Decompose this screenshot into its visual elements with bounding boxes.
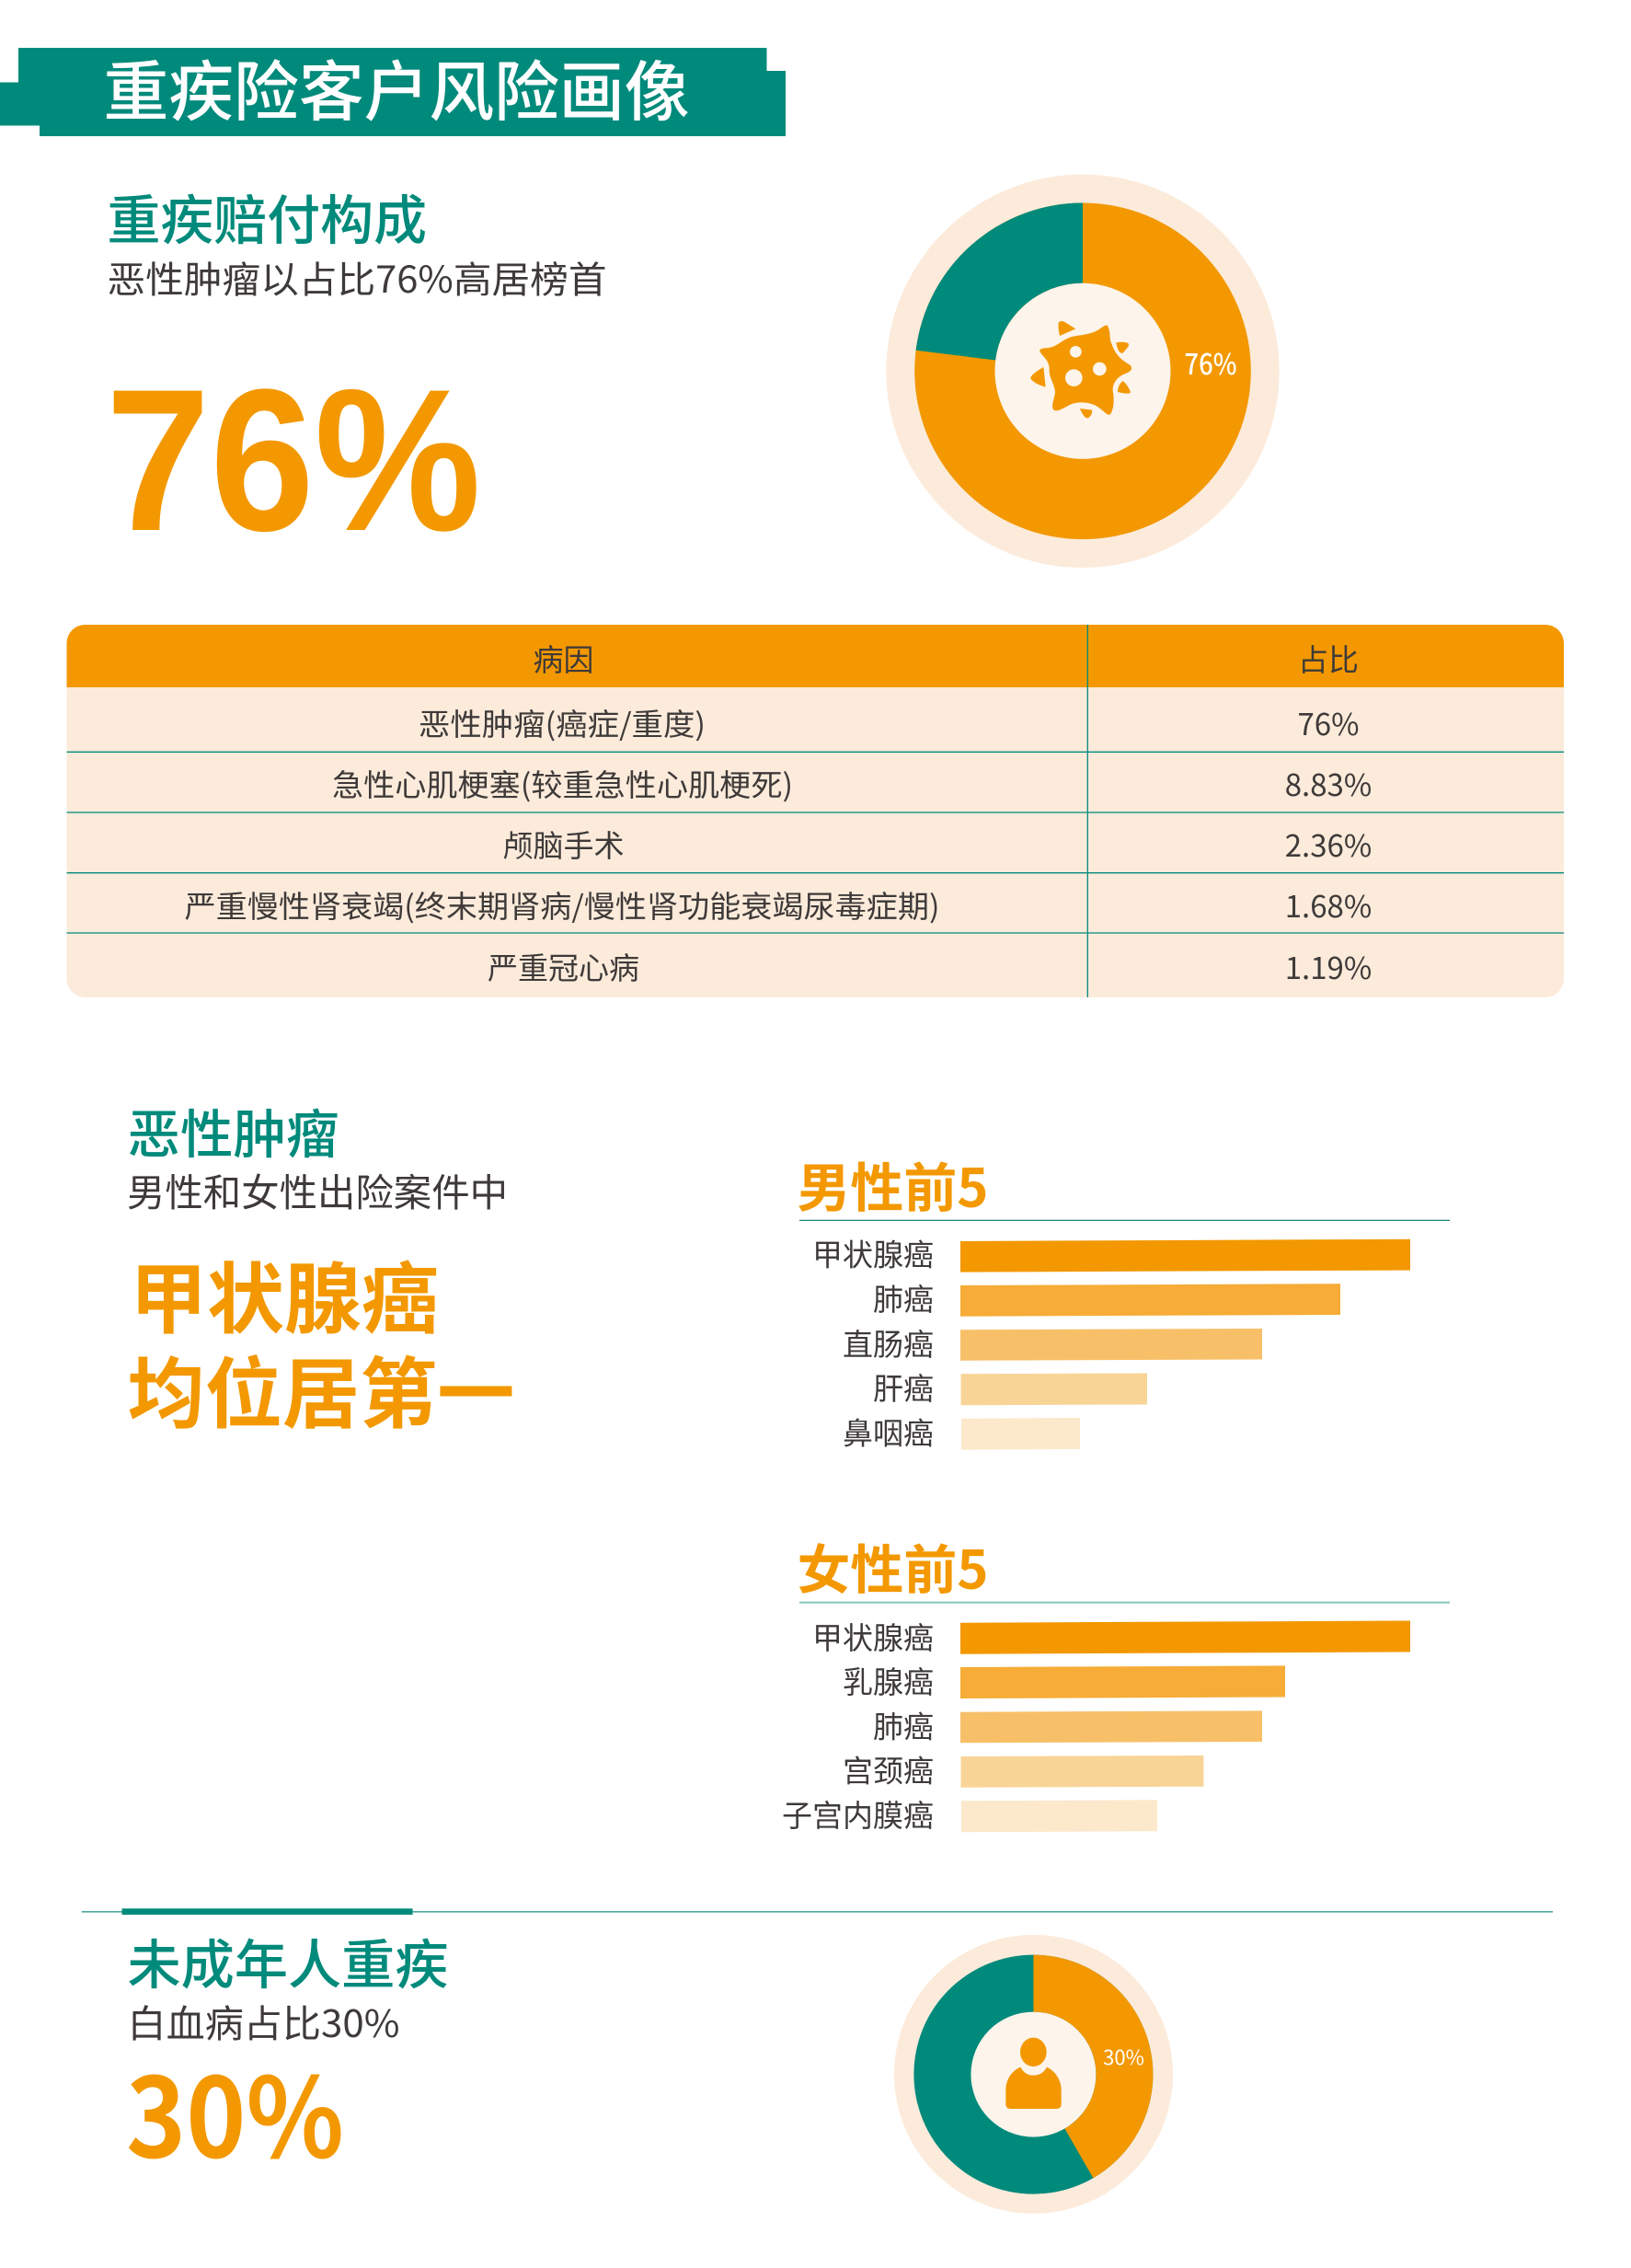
heading: claims composition: 重疾赔付构成 xyxy=(107,178,427,255)
big number 76%: 76% xyxy=(106,347,481,573)
bar: endometrial xyxy=(782,1791,1157,1836)
row 2: 急性心肌梗塞(较重急性心肌梗死) xyxy=(332,761,793,805)
bar: thyroid xyxy=(812,1231,1410,1275)
row 5 xyxy=(488,944,1372,988)
heading: female top 5: 女性前5 xyxy=(797,1527,988,1605)
table: causes and shares xyxy=(66,625,1564,997)
heading: malignant tumor: 恶性肿瘤 xyxy=(127,1093,339,1169)
title banner: 重疾险客户风险画像 xyxy=(103,40,690,134)
row 5: 严重冠心病 xyxy=(488,944,639,988)
row 2 xyxy=(332,761,1372,805)
donut chart: 30% xyxy=(894,1935,1173,2214)
row 3 xyxy=(502,822,1372,866)
bar: nasopharyngeal xyxy=(843,1410,1080,1454)
bar: rectal: 直肠癌 xyxy=(843,1320,934,1364)
icon: cancer cell xyxy=(1030,321,1131,418)
table header: 病因 xyxy=(534,636,594,680)
row 1: 76% xyxy=(1297,700,1360,744)
bar chart: female top 5 xyxy=(782,1527,1450,1836)
table header xyxy=(534,636,1359,680)
row 3: 2.36% xyxy=(1285,822,1372,866)
section: minors critical illness xyxy=(126,1922,448,2190)
section divider xyxy=(82,1908,1553,1915)
donut chart: 76% xyxy=(886,175,1280,568)
bar: rectal xyxy=(843,1320,1262,1364)
bar: liver xyxy=(873,1364,1147,1409)
donut label 30%: 30% xyxy=(1103,2042,1144,2071)
row 4 xyxy=(184,882,1372,927)
subheading: malignant tumor share: 恶性肿瘤以占比76%高居榜首 xyxy=(107,250,607,304)
icon: person xyxy=(1005,2038,1062,2109)
row 4: 严重慢性肾衰竭(终末期肾病/慢性肾功能衰竭尿毒症期) xyxy=(184,882,940,927)
heading: male top 5: 男性前5 xyxy=(797,1145,988,1222)
heading: minors: 未成年人重疾 xyxy=(127,1922,448,1999)
row 4: 1.68% xyxy=(1285,882,1372,927)
row 5: 1.19% xyxy=(1285,944,1372,988)
subheading: male and female cases: 男性和女性出险案件中 xyxy=(127,1162,508,1217)
bar: liver: 肝癌 xyxy=(873,1364,934,1409)
table header: 占比 xyxy=(1298,636,1359,680)
bar: nasopharyngeal: 鼻咽癌 xyxy=(843,1410,934,1454)
big number 30%: 30% xyxy=(126,2030,344,2190)
bar: lung: 肺癌 xyxy=(873,1275,934,1319)
bar: cervical: 宫颈癌 xyxy=(843,1746,934,1790)
bar: cervical xyxy=(843,1746,1203,1790)
subheading: leukemia share: 白血病占比30% xyxy=(127,1993,400,2048)
section: malignant tumor callout xyxy=(127,1093,515,1445)
section: claims composition xyxy=(106,178,607,573)
bar: thyroid: 甲状腺癌 xyxy=(812,1614,934,1658)
bar: lung: 肺癌 xyxy=(873,1702,934,1746)
bar: thyroid xyxy=(812,1614,1410,1658)
bar: breast: 乳腺癌 xyxy=(843,1658,934,1702)
row 2: 8.83% xyxy=(1285,761,1372,805)
bar: lung xyxy=(873,1275,1340,1319)
bar: lung xyxy=(873,1702,1262,1746)
bar: breast xyxy=(843,1658,1285,1702)
donut label 76%: 76% xyxy=(1185,341,1236,383)
highlight line 2: 均位居第一 xyxy=(127,1333,515,1445)
row 1 xyxy=(419,700,1360,744)
row 3: 颅脑手术 xyxy=(502,822,624,866)
row 1: 恶性肿瘤(癌症/重度) xyxy=(419,700,706,744)
highlight line 1: 甲状腺癌 xyxy=(130,1238,439,1350)
bar chart: male top 5 xyxy=(797,1145,1450,1454)
bar: thyroid: 甲状腺癌 xyxy=(812,1231,934,1275)
bar: endometrial: 子宫内膜癌 xyxy=(782,1791,934,1836)
